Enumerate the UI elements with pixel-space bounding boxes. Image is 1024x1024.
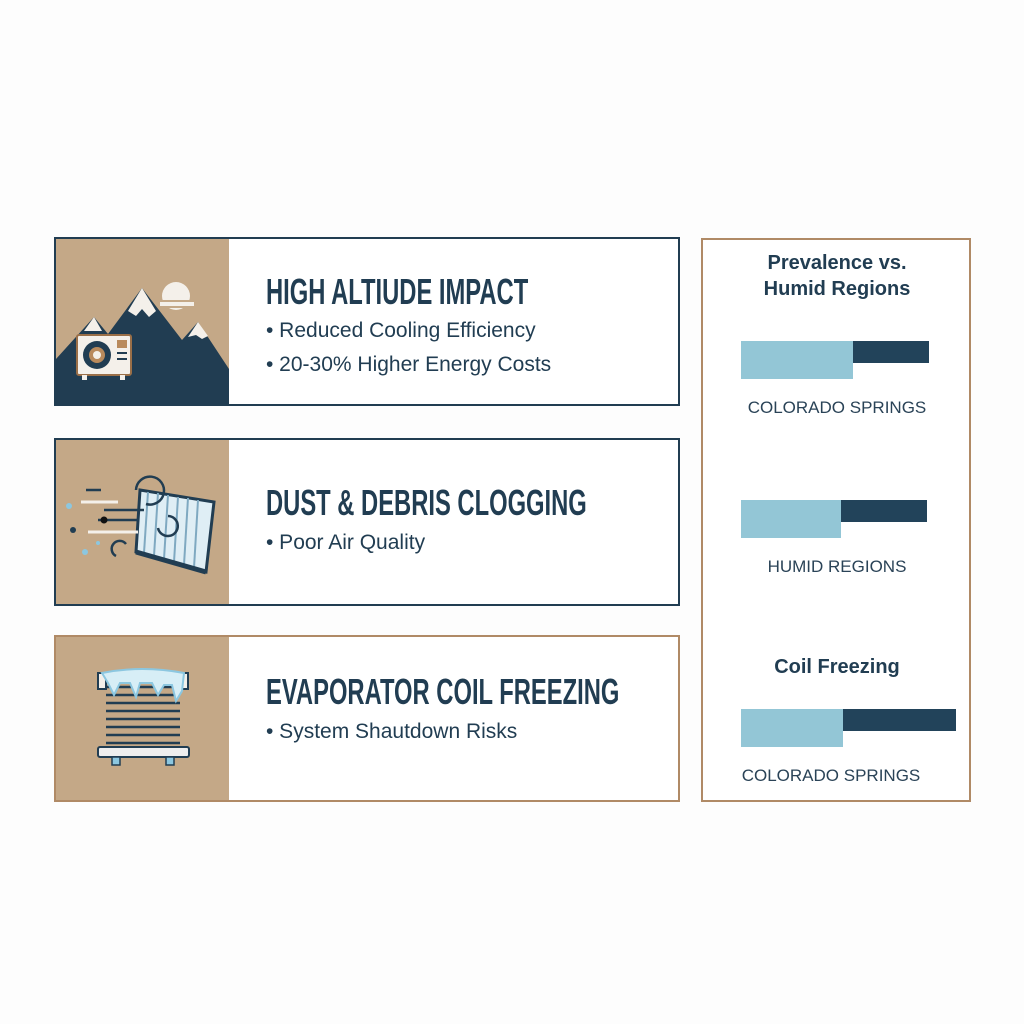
subheading: Coil Freezing — [774, 656, 900, 678]
label: COLORADO SPRINGS — [748, 398, 926, 417]
icon: frozen coil — [56, 637, 229, 800]
bullets: • Reduced Cooling Efficiency — [266, 319, 536, 342]
bullet: • System Shautdown Risks — [266, 720, 517, 743]
icon: mountains with AC unit — [56, 239, 229, 404]
chart heading: Humid Regions — [764, 278, 910, 300]
panel: prevalence chart — [701, 238, 971, 802]
bar: humid regions — [741, 500, 927, 538]
bullet: • Poor Air Quality — [266, 531, 425, 554]
bar: colorado springs — [741, 341, 929, 379]
label: HUMID REGIONS — [768, 557, 906, 576]
icon: filter with wind — [56, 440, 229, 604]
chart heading: Prevalence vs. — [768, 252, 906, 274]
bullets: • 20-30% Higher Energy Costs — [266, 353, 551, 376]
panel: high altitude impact — [54, 237, 680, 406]
label: COLORADO SPRINGS — [742, 766, 920, 785]
panel: evaporator coil freezing — [54, 635, 680, 802]
heading: DUST & DEBRIS CLOGGING — [266, 482, 587, 523]
heading: EVAPORATOR COIL FREEZING — [266, 671, 619, 712]
bullets — [266, 319, 551, 376]
bar: coil freezing colorado — [741, 709, 956, 747]
panel: dust and debris — [54, 438, 680, 606]
heading: HIGH ALTIUDE IMPACT — [266, 271, 528, 312]
chart heading — [764, 252, 910, 300]
